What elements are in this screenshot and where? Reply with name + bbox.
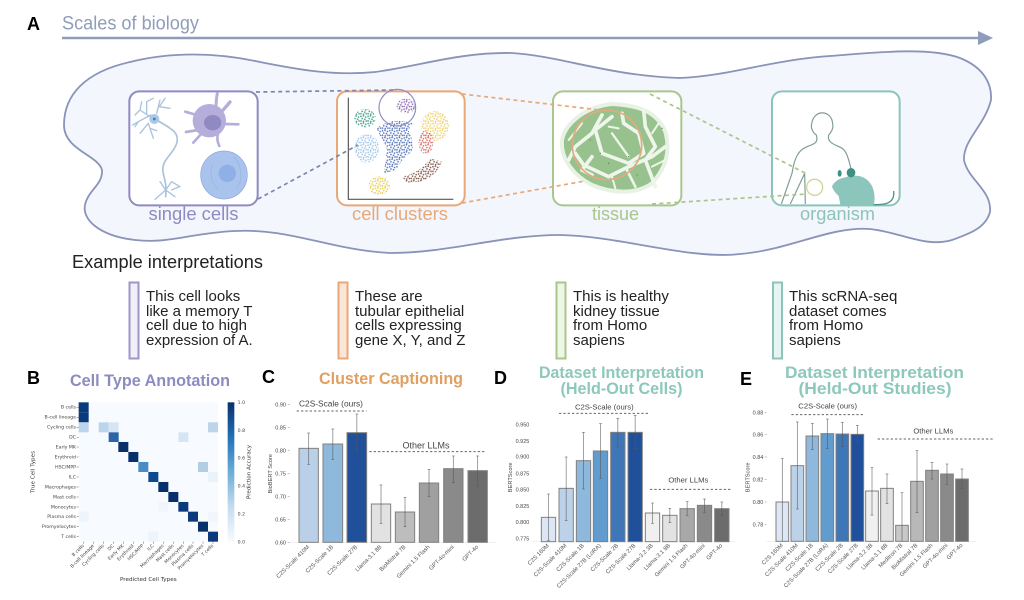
colorbar: 0.2	[238, 511, 245, 517]
x axis labels: Llama-3.2 3B	[846, 543, 874, 572]
x axis labels: GPT-4o	[946, 543, 964, 561]
x axis labels: Gemini 1.5 Flash	[899, 543, 934, 578]
x axis labels: C2S-Scale 27B	[327, 544, 359, 577]
x axis category labels: B cells	[71, 543, 86, 558]
text block: organism example	[773, 282, 897, 358]
x axis category labels: DC	[107, 543, 116, 552]
heading: held-out cells: Dataset Interpretation	[539, 363, 704, 382]
x axis labels: C2S-Scale 410M	[533, 543, 569, 579]
label: single cells: single cells	[148, 204, 238, 224]
error bars	[307, 414, 479, 527]
y axis ticks: 0.75	[275, 472, 286, 478]
bracket: other LLMs: Other LLMs	[913, 426, 954, 435]
x axis labels: C2S-Scale 27B (LoRA)	[783, 543, 830, 589]
x axis labels: GPT-4o-mini	[428, 545, 456, 572]
heading: held-out studies	[785, 363, 964, 398]
x axis labels: C2S-Scale 410M	[764, 543, 800, 578]
bracket: C2S-Scale	[791, 402, 865, 415]
y axis ticks: 0.875	[516, 471, 529, 477]
error bars	[781, 419, 963, 541]
y axis category labels: B-cell lineage	[45, 415, 76, 421]
chart: held-out cells bars	[508, 402, 735, 590]
bracket: C2S-Scale: C2S-Scale (ours)	[798, 402, 857, 411]
x axis labels	[527, 543, 724, 590]
y axis category labels	[42, 405, 77, 540]
y axis category labels: Early MK	[56, 444, 77, 450]
icon: neuron	[133, 98, 180, 199]
chart: scatter of clusters	[348, 89, 453, 199]
x axis labels: C2S-Scale 27B	[605, 543, 637, 576]
y axis category labels: Monocytes	[51, 504, 77, 510]
x axis labels: C2S-Scale 410M	[276, 544, 311, 580]
y axis category labels: DC	[69, 435, 76, 441]
panel label C: C	[262, 367, 275, 387]
text block: tissue example: This is healthy	[573, 288, 669, 305]
chart: cluster captioning bars	[268, 399, 497, 580]
y axis ticks: 0.775	[516, 537, 529, 543]
x axis category labels: Cycling cells	[81, 543, 106, 568]
y axis category labels: Promyelocytes	[42, 524, 77, 530]
x axis labels: C2S-Scale 2B	[815, 543, 845, 573]
colorbar: Prediction Accuracy	[246, 444, 252, 499]
bracket: other LLMs	[650, 476, 731, 489]
y axis ticks: 0.90	[275, 402, 286, 408]
heading: held-out cells	[539, 363, 704, 398]
x axis category labels: Erythroid	[116, 543, 135, 562]
icon: mouse	[832, 168, 894, 205]
axis title: predicted: Predicted Cell Types	[120, 577, 177, 583]
y axis category labels: HSC/MPP	[55, 464, 76, 470]
x axis labels	[276, 544, 480, 580]
box: cell clusters	[337, 89, 465, 205]
y axis category labels: Plasma cells	[47, 514, 77, 520]
x axis labels: Llama-3.1 8B	[355, 544, 383, 573]
x axis labels: C2S-Scale 27B (LoRA)	[556, 543, 603, 590]
x axis labels: C2S-Scale 1B	[305, 544, 335, 575]
bracket: C2S-Scale	[559, 402, 649, 413]
heading: example interpretations: Example interpretations	[72, 252, 263, 272]
colorbar: 0.8	[238, 428, 245, 434]
x axis labels: C2S-Scale 1B	[785, 543, 815, 573]
icon: kidney tissue section	[562, 104, 667, 192]
x axis category labels: Mast cells	[155, 543, 176, 564]
x axis labels: Meditron 7B	[878, 543, 904, 569]
text block: cluster example	[338, 282, 465, 358]
x axis labels: BioMistral 7B	[891, 543, 919, 571]
y axis ticks: 0.60	[275, 540, 286, 546]
x axis labels: C2S-Scale 27B	[827, 543, 860, 575]
colorbar: 0.6	[238, 456, 245, 462]
connectors: clusters to tissue	[462, 94, 600, 203]
text block: tissue example: kidney tissue	[573, 303, 660, 320]
axis title: true: True Cell Types	[31, 451, 37, 494]
error bars	[547, 415, 723, 541]
y axis category labels: Macrophages	[45, 484, 77, 490]
x axis category labels: Plasma cells	[171, 543, 195, 568]
box: organism	[772, 91, 900, 205]
text block: organism example: from Homo	[789, 317, 863, 334]
x axis labels: C2S-Scale 1B	[556, 543, 586, 573]
x axis labels: Gemini 1.5 Flash	[396, 545, 431, 580]
text block: tissue example	[556, 282, 669, 358]
heading: held-out studies: (Held-Out Studies)	[798, 379, 952, 398]
text block: single cell example: like a memory T	[146, 303, 252, 320]
y axis ticks: 0.800	[516, 520, 529, 526]
icon: round cell	[201, 151, 247, 199]
x axis labels: C2S 160M	[527, 543, 551, 567]
label: organism: organism	[800, 204, 875, 224]
text block: single cell example: This cell looks	[146, 288, 240, 305]
x axis category labels: B-cell lineage	[69, 543, 96, 570]
colorbar: 1.0	[238, 400, 245, 406]
heading: held-out studies: Dataset Interpretation	[785, 363, 964, 382]
x axis labels: Llama-3.1 8B	[643, 543, 672, 572]
x axis category labels: Macrophages	[139, 543, 166, 569]
text block: single cell example: expression of A.	[146, 332, 253, 349]
text block: organism example: This scRNA-seq	[789, 288, 897, 305]
heading: scales of biology: Scales of biology	[62, 14, 199, 34]
chart: confusion heatmap	[31, 400, 252, 583]
x axis labels: GPT-4o	[462, 545, 480, 563]
y axis ticks	[753, 411, 763, 529]
y axis ticks: 0.86	[753, 433, 763, 439]
text block: tissue example: from Homo	[573, 317, 647, 334]
y axis ticks: 0.84	[753, 455, 763, 461]
chart: held-out studies bars	[745, 402, 993, 589]
y axis ticks: 0.900	[516, 455, 529, 461]
colorbar: 0.4	[238, 484, 245, 490]
y axis category labels: Cycling cells	[47, 425, 77, 431]
text block: organism example: sapiens	[789, 332, 841, 349]
y axis ticks: 0.825	[516, 504, 529, 510]
bracket: other LLMs	[878, 426, 993, 439]
heading: cluster captioning: Cluster Captioning	[319, 369, 463, 388]
y axis ticks: 0.78	[753, 523, 763, 529]
y axis category labels: T cells	[60, 534, 77, 540]
text block: tissue example: sapiens	[573, 332, 625, 349]
y axis ticks: 0.850	[516, 488, 529, 494]
y axis category labels: B cells	[61, 405, 77, 411]
x axis category labels: T cells	[200, 543, 215, 559]
text block: single cell example: cell due to high	[146, 317, 247, 334]
connectors: tissue to organism	[650, 94, 807, 204]
x axis labels: GPT-4o-mini	[679, 543, 707, 571]
x axis category labels: HSC/MPP	[126, 543, 146, 562]
box: single cells	[129, 91, 258, 205]
y axis ticks: 0.70	[275, 495, 286, 501]
bracket: other LLMs: Other LLMs	[668, 476, 709, 485]
label: tissue: tissue	[592, 204, 639, 224]
x axis labels	[761, 543, 964, 589]
icon: human silhouette	[781, 113, 851, 204]
bars	[299, 433, 487, 542]
y axis ticks: 0.82	[753, 478, 763, 484]
y axis ticks: 0.80	[275, 449, 286, 455]
y axis ticks: 0.80	[753, 500, 763, 506]
x axis category labels: ILC	[146, 543, 155, 553]
text block: single cell example	[130, 282, 253, 358]
text block: cluster example: gene X, Y, and Z	[355, 332, 465, 349]
y axis title: BioBERT Score	[268, 454, 274, 493]
y axis title: BERTScore	[745, 462, 751, 492]
colorbar: 0.0	[238, 539, 245, 545]
text block: organism example: dataset comes	[789, 303, 887, 320]
x axis labels: Llama-3.1 8B	[861, 543, 889, 572]
colorbar	[228, 400, 252, 545]
y axis category labels: Erythroid	[55, 454, 76, 460]
bars	[541, 432, 729, 542]
text block: cluster example: These are	[355, 288, 423, 305]
bracket: other LLMs: Other LLMs	[403, 441, 450, 451]
x axis category labels: Early MK	[107, 543, 126, 562]
panel label B: B	[27, 368, 40, 388]
bracket: C2S-Scale: C2S-Scale (ours)	[575, 402, 634, 411]
y axis ticks: 0.950	[516, 423, 529, 429]
y axis category labels: ILC	[69, 474, 76, 480]
x axis labels: C2S-Scale 2B	[590, 543, 620, 573]
y axis ticks: 0.88	[753, 411, 763, 417]
x axis labels: C2S 160M	[761, 543, 785, 567]
connectors: single cells to clusters	[256, 90, 397, 199]
y axis ticks: 0.65	[275, 518, 286, 524]
x axis labels: Gemini 1.5 Flash	[654, 543, 689, 579]
icon: macrophage	[185, 93, 238, 146]
y axis category labels: Mast cells	[53, 494, 77, 500]
x axis category labels: Monocytes	[163, 543, 186, 565]
arrow: scale axis	[62, 31, 993, 45]
panel: scales background blob	[64, 51, 991, 255]
x axis category labels	[69, 543, 215, 572]
y axis title: BERTScore	[508, 462, 514, 492]
x axis category labels: Promyelocytes	[177, 543, 205, 572]
panel label D: D	[494, 368, 507, 388]
box: tissue	[553, 91, 681, 205]
text block: cluster example: tubular epithelial	[355, 303, 464, 320]
heading: cell type annotation: Cell Type Annotation	[70, 371, 230, 390]
y axis ticks: 0.925	[516, 439, 529, 445]
panel label E: E	[740, 369, 752, 389]
x axis labels: GPT-4o	[706, 543, 724, 562]
panel label A: A	[27, 14, 40, 34]
bracket: C2S-Scale: C2S-Scale (ours)	[299, 399, 363, 409]
bracket: other LLMs	[369, 441, 485, 452]
text block: cluster example: cells expressing	[355, 317, 462, 334]
x axis labels: BioMistral 7B	[379, 544, 407, 573]
y axis ticks: 0.85	[275, 426, 286, 432]
y axis ticks	[275, 402, 286, 546]
heading: held-out cells: (Held-Out Cells)	[560, 379, 682, 398]
x axis labels: Llama-3.2 3B	[626, 543, 655, 572]
label: cell clusters: cell clusters	[352, 204, 448, 224]
bars	[776, 434, 968, 541]
icon: organ circle	[807, 179, 823, 195]
x axis labels: GPT-4o-mini	[922, 543, 949, 570]
y axis ticks	[516, 423, 529, 543]
